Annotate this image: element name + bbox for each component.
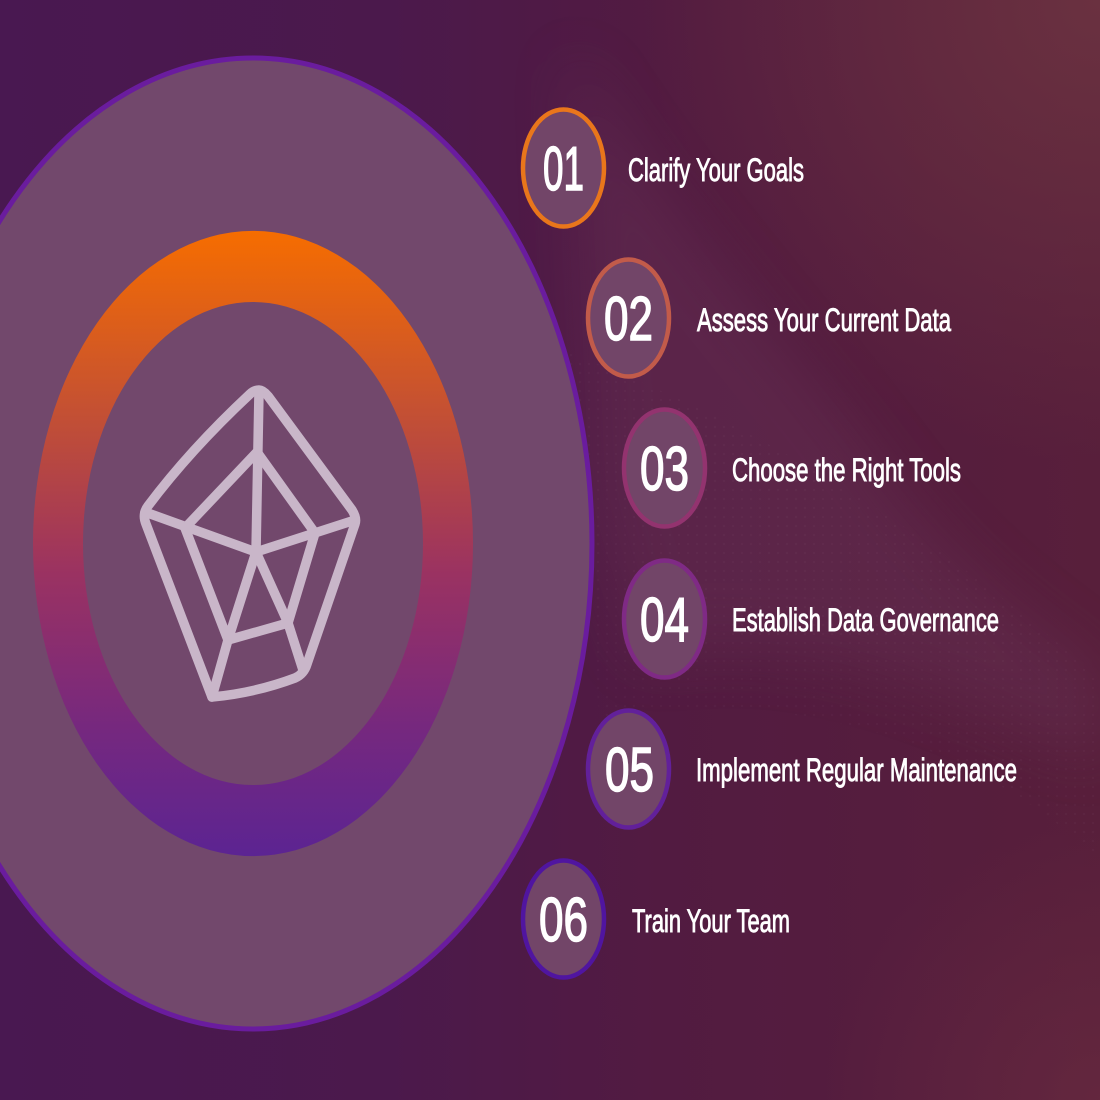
step 06 — [523, 860, 790, 978]
number 06: 06 — [539, 886, 588, 955]
step 01 — [523, 110, 804, 226]
label 01: Clarify Your Goals — [628, 152, 804, 188]
panel: large translucent ellipse — [0, 58, 592, 1029]
label 03: Choose the Right Tools — [732, 452, 961, 488]
number 03: 03 — [640, 435, 689, 504]
label 06: Train Your Team — [632, 903, 790, 939]
icon: radar pentagon — [144, 390, 356, 697]
number 02: 02 — [604, 285, 653, 354]
number 04: 04 — [640, 586, 689, 655]
step 02 — [588, 260, 951, 376]
gradient ring — [33, 231, 473, 856]
number 01: 01 — [543, 135, 584, 204]
number 05: 05 — [605, 736, 654, 805]
step 05 — [588, 710, 1017, 828]
step 03 — [624, 410, 961, 526]
label 02: Assess Your Current Data — [697, 302, 951, 338]
step 04 — [624, 560, 999, 678]
